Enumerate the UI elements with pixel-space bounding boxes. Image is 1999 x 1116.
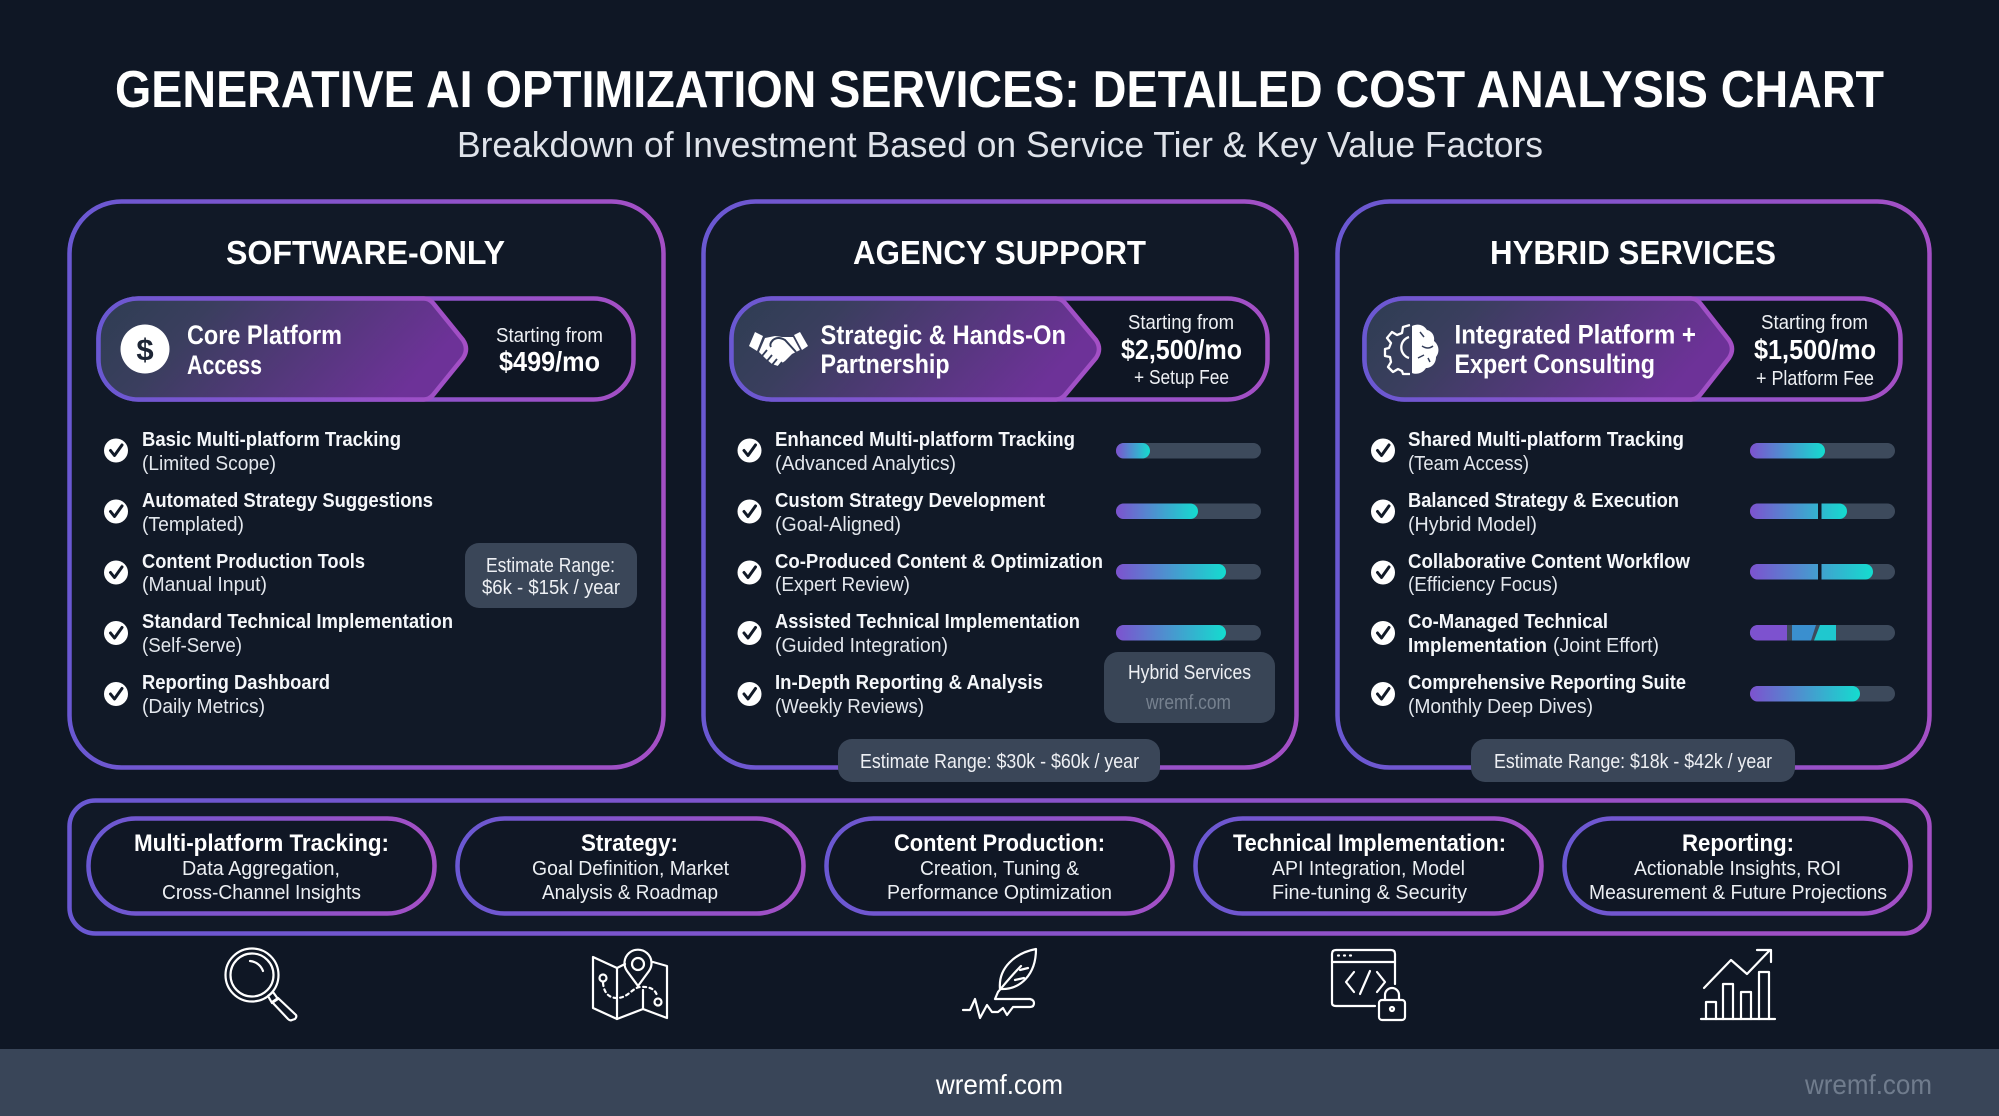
- pill: strategy: Analysis & Roadmap: [542, 881, 718, 904]
- feature: technical: (Joint Effort): [1553, 635, 1659, 657]
- heading: agency support: AGENCY SUPPORT: [853, 234, 1146, 271]
- feature: tracking: (Team Access): [1408, 453, 1529, 475]
- feature: tracking: Basic Multi-platform Tracking: [142, 428, 401, 451]
- subtitle: Breakdown of Investment Based on Service Tier & Key Value Factors: [457, 124, 1543, 165]
- pill: multi-platform tracking: Multi-platform Tracking:: [134, 830, 389, 857]
- pill: multi-platform tracking: Data Aggregation,: [182, 857, 340, 880]
- pill: content production: [826, 818, 1172, 914]
- price: $499/mo: [499, 346, 600, 377]
- bar: content: [1750, 564, 1895, 580]
- feature: tracking: (Advanced Analytics): [775, 453, 956, 475]
- callout: estimate range: [838, 739, 1160, 782]
- feature: technical: Co-Managed Technical: [1408, 610, 1608, 633]
- panel: agency support: [704, 202, 1296, 782]
- tier name: Partnership: [820, 349, 950, 379]
- icon: magnifying glass: [226, 948, 296, 1020]
- price: Starting from: [496, 325, 603, 347]
- feature: tracking: [1371, 428, 1684, 475]
- feature: technical: Assisted Technical Implementation: [775, 610, 1080, 633]
- pill: reporting: Actionable Insights, ROI: [1634, 857, 1841, 880]
- pill: content production: Creation, Tuning &: [920, 857, 1079, 880]
- tier name: Strategic & Hands-On: [820, 320, 1066, 350]
- tier banner: core platform: [98, 298, 634, 400]
- panel: software-only: [70, 202, 664, 768]
- pill: content production: Content Production:: [894, 830, 1105, 857]
- tier banner: integrated platform: [1364, 298, 1900, 400]
- pill: reporting: Measurement & Future Projections: [1589, 881, 1887, 904]
- price: Starting from: [1761, 312, 1868, 334]
- tier name: [1454, 320, 1696, 379]
- feature: reporting: [738, 671, 1043, 718]
- price: [496, 325, 603, 377]
- icon: dollar coin: [120, 324, 170, 374]
- feature: reporting: In-Depth Reporting & Analysis: [775, 671, 1043, 694]
- tier name: Core Platform: [187, 320, 342, 350]
- footer site name: wremf.com: [935, 1069, 1063, 1100]
- price: Starting from: [1128, 312, 1234, 334]
- callout: estimate range: [1471, 739, 1795, 782]
- price: $1,500/mo: [1754, 334, 1876, 365]
- tier name: [187, 320, 342, 380]
- feature: technical: [738, 610, 1080, 657]
- tier name: Access: [187, 350, 262, 380]
- feature: technical: (Self-Serve): [142, 635, 242, 657]
- feature: content: Content Production Tools: [142, 550, 365, 573]
- bar: tracking: [1750, 443, 1895, 458]
- pill: reporting: Reporting:: [1682, 830, 1794, 857]
- pill: content production: Performance Optimization: [887, 881, 1112, 904]
- feature: reporting: (Weekly Reviews): [775, 696, 924, 718]
- tier name: Expert Consulting: [1454, 349, 1655, 379]
- icon: code window and lock: [1332, 950, 1405, 1020]
- feature: content: Co-Produced Content & Optimization: [775, 550, 1103, 573]
- callout: hybrid services watermark: [1104, 652, 1275, 723]
- feature: reporting: (Monthly Deep Dives): [1408, 696, 1593, 718]
- feature: tracking: [738, 428, 1075, 475]
- icon: handshake: [749, 332, 808, 367]
- icon: dollar coin: $: [136, 332, 154, 367]
- price: [1121, 312, 1242, 389]
- feature: content: Collaborative Content Workflow: [1408, 550, 1690, 573]
- pill: multi-platform tracking: [88, 818, 434, 914]
- icon: feather and signal: [963, 949, 1036, 1018]
- callout: hybrid services watermark: Hybrid Services: [1128, 662, 1251, 684]
- pill: reporting: [1564, 818, 1910, 914]
- feature: content: [104, 550, 365, 596]
- feature: reporting: [1371, 671, 1686, 718]
- bar: strategy: [1750, 504, 1895, 519]
- feature: technical: Standard Technical Implementation: [142, 610, 453, 633]
- heading: software-only: SOFTWARE-ONLY: [226, 234, 505, 271]
- feature: tracking: [104, 428, 401, 475]
- feature: tracking: Shared Multi-platform Tracking: [1408, 428, 1684, 451]
- callout: estimate range: $6k - $15k / year: [482, 577, 620, 599]
- heading: hybrid services: HYBRID SERVICES: [1490, 234, 1776, 271]
- feature: technical: Implementation: [1408, 634, 1547, 657]
- feature: content: (Manual Input): [142, 574, 267, 596]
- feature: content: (Expert Review): [775, 574, 910, 596]
- bar: reporting: [1750, 686, 1895, 702]
- bar: content: [1116, 564, 1261, 580]
- bar: technical: [1750, 625, 1895, 640]
- callout: estimate range: [465, 543, 637, 608]
- feature: strategy: Custom Strategy Development: [775, 489, 1045, 512]
- callout: estimate range: Estimate Range:: [486, 555, 615, 577]
- feature: reporting: [104, 671, 330, 718]
- feature: technical: [1371, 610, 1659, 657]
- feature: reporting: (Daily Metrics): [142, 696, 265, 718]
- feature: reporting: Reporting Dashboard: [142, 671, 330, 694]
- value factors band: [70, 800, 1930, 934]
- feature: content: (Efficiency Focus): [1408, 574, 1558, 596]
- price: + Platform Fee: [1756, 368, 1874, 390]
- feature: strategy: [1371, 489, 1679, 536]
- pill: technical implementation: [1196, 818, 1542, 914]
- pill: technical implementation: API Integration, Model: [1272, 857, 1465, 880]
- callout: estimate range: Estimate Range: $30k - $60k / year: [860, 751, 1139, 773]
- feature: content: [1371, 550, 1690, 596]
- feature: strategy: (Goal-Aligned): [775, 514, 901, 536]
- icon: map with pin: [593, 950, 667, 1019]
- callout: hybrid services watermark: wremf.com: [1145, 692, 1231, 714]
- price: [1754, 312, 1876, 390]
- feature: strategy: [738, 489, 1045, 536]
- feature: strategy: Automated Strategy Suggestions: [142, 489, 433, 512]
- bar: strategy: [1116, 504, 1261, 519]
- pill: technical implementation: Technical Implementation:: [1233, 830, 1506, 857]
- icon: growth chart: [1701, 950, 1775, 1019]
- bar: technical: [1116, 625, 1261, 640]
- feature: strategy: [104, 489, 433, 536]
- pill: strategy: [458, 818, 804, 914]
- tier name: Integrated Platform +: [1454, 320, 1696, 350]
- bar: tracking: [1116, 443, 1261, 458]
- panel: hybrid services: [1338, 202, 1930, 782]
- tier banner: strategic partnership: [732, 298, 1268, 400]
- feature: strategy: (Templated): [142, 514, 244, 536]
- feature: content: [738, 550, 1103, 596]
- pill: multi-platform tracking: Cross-Channel Insights: [162, 881, 361, 904]
- icon: gear and brain: [1385, 325, 1438, 374]
- footer watermark: wremf.com: [1804, 1069, 1932, 1100]
- feature: tracking: (Limited Scope): [142, 453, 276, 475]
- feature: strategy: Balanced Strategy & Execution: [1408, 489, 1679, 512]
- feature: strategy: (Hybrid Model): [1408, 514, 1537, 536]
- callout: estimate range: Estimate Range: $18k - $42k / year: [1494, 751, 1772, 773]
- pill: strategy: Strategy:: [581, 830, 678, 857]
- footer bar: [0, 1049, 1999, 1116]
- feature: tracking: Enhanced Multi-platform Tracking: [775, 428, 1075, 451]
- pill: strategy: Goal Definition, Market: [532, 857, 729, 880]
- price: + Setup Fee: [1134, 367, 1229, 389]
- tier name: [820, 320, 1066, 379]
- feature: technical: (Guided Integration): [775, 635, 948, 657]
- feature: reporting: Comprehensive Reporting Suite: [1408, 671, 1686, 694]
- price: $2,500/mo: [1121, 334, 1242, 365]
- pill: technical implementation: Fine-tuning & Security: [1272, 881, 1468, 904]
- feature: technical: [104, 610, 453, 657]
